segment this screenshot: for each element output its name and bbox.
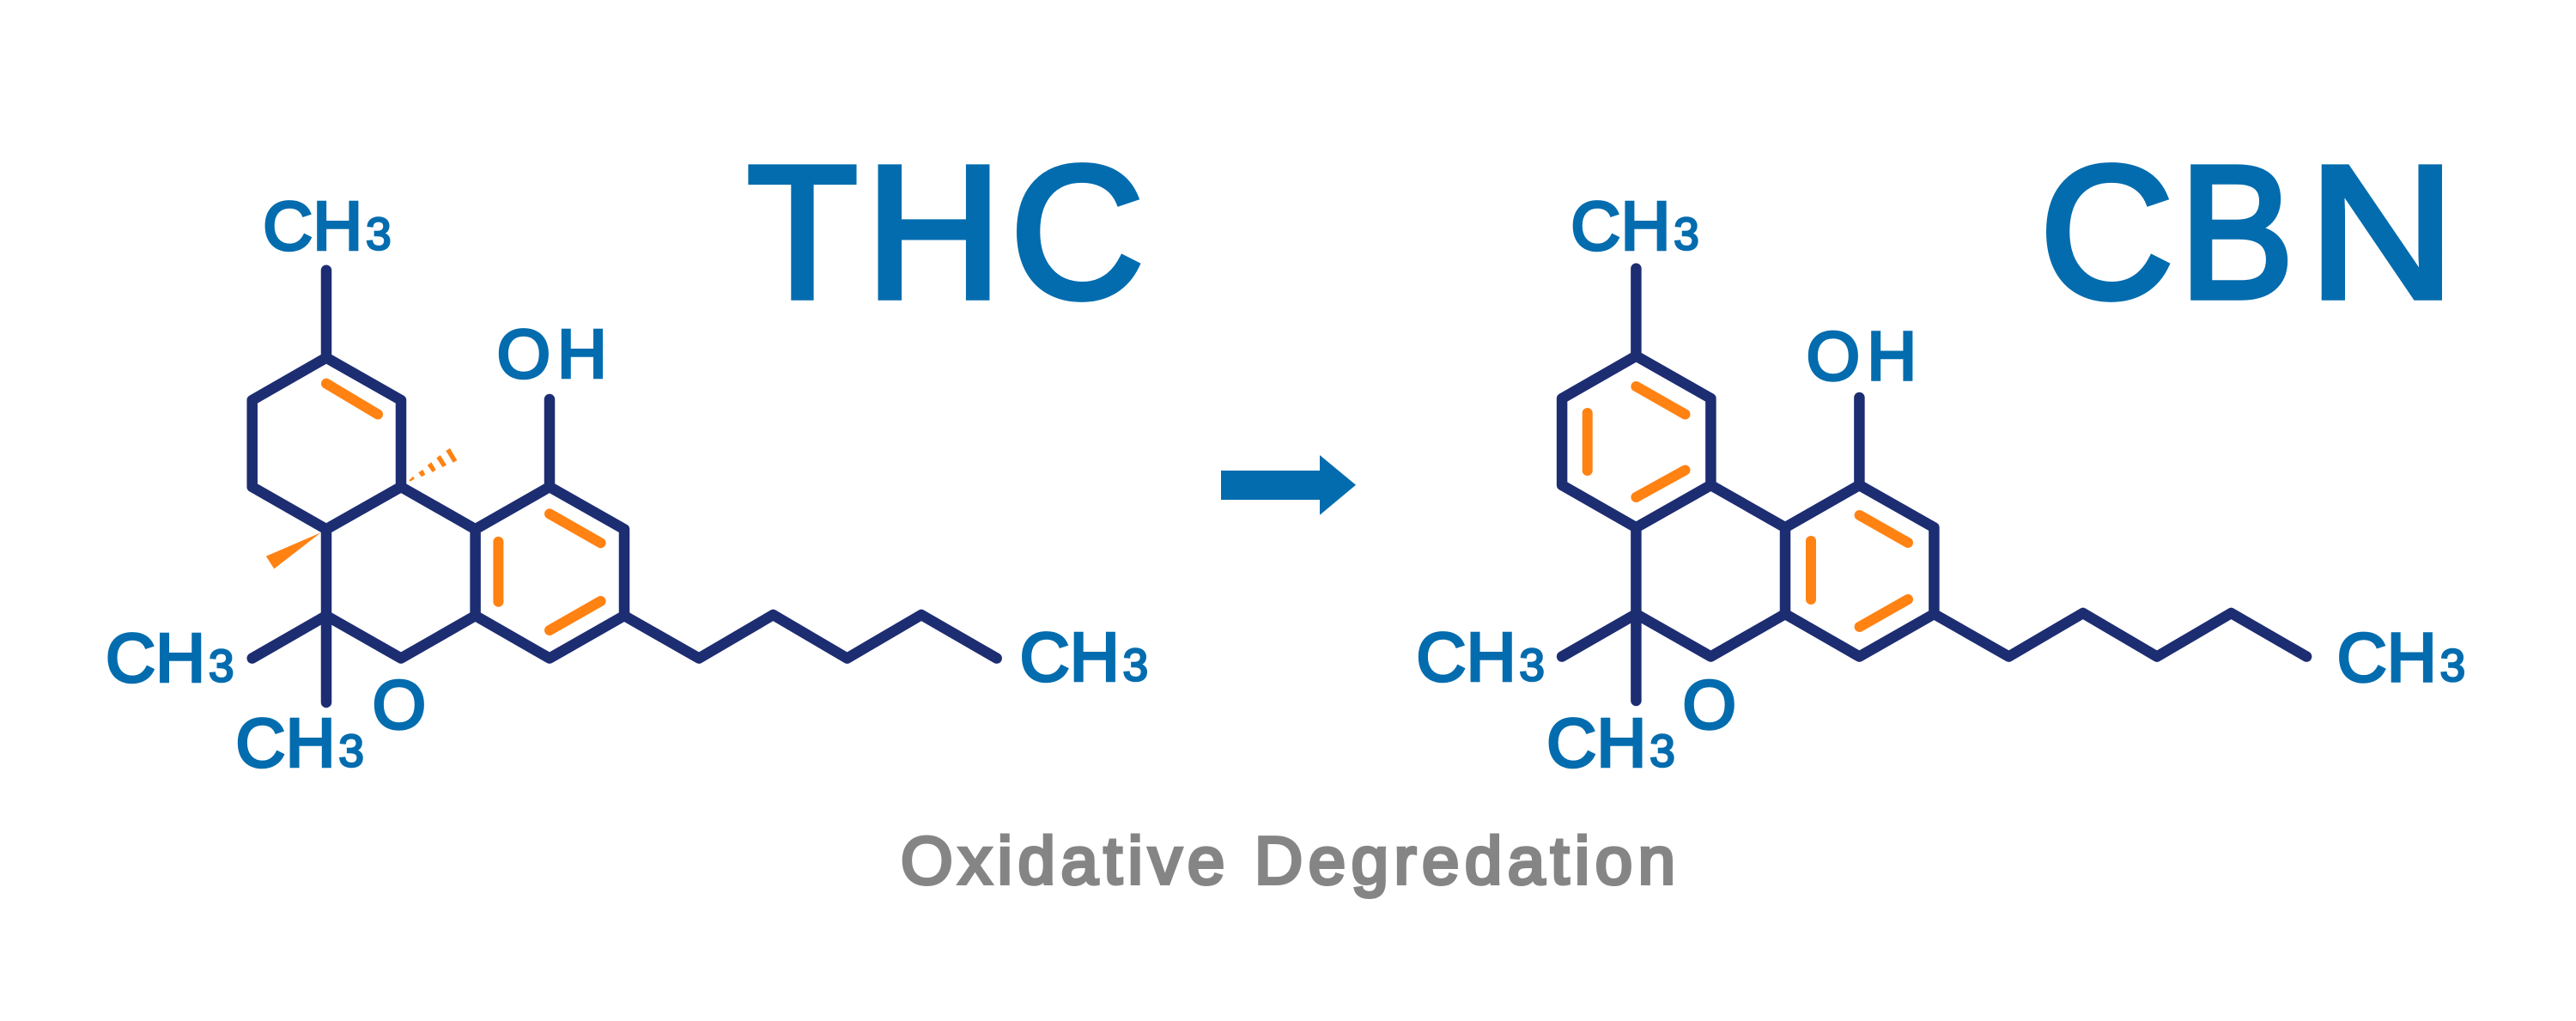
CBN skeletal bonds bbox=[1562, 269, 2306, 701]
CBN label: left CH3 bbox=[1417, 618, 1545, 696]
CBN label: chain CH3 bbox=[2337, 619, 2465, 696]
THC label: bottom CH3: 3 bbox=[338, 726, 364, 776]
CBN label: chain CH3: 3 bbox=[2440, 641, 2465, 691]
heading: THC: C bbox=[1010, 127, 1144, 338]
THC label: top CH3: 3 bbox=[366, 209, 392, 259]
CBN label: ring oxygen: O bbox=[1683, 666, 1736, 743]
panel: THC molecule bbox=[106, 187, 1148, 781]
heading: CBN: C bbox=[2040, 127, 2173, 338]
CBN label: left CH3: C bbox=[1417, 618, 1466, 696]
CBN label: bottom CH3: H bbox=[1597, 704, 1646, 781]
caption: Oxidative Degredation: Oxidative Degredation bbox=[901, 823, 1675, 898]
THC solid wedge bbox=[266, 532, 321, 568]
heading: CBN bbox=[2040, 126, 2456, 338]
THC label: chain CH3: H bbox=[1070, 618, 1120, 696]
THC label: left CH3: C bbox=[106, 620, 155, 696]
heading: THC: T bbox=[747, 126, 858, 337]
THC label: chain CH3: 3 bbox=[1123, 641, 1148, 690]
THC skeletal bonds bbox=[252, 270, 997, 702]
THC label: ring oxygen: O bbox=[373, 666, 426, 743]
THC label: OH: H bbox=[557, 316, 607, 392]
THC label: bottom CH3: H bbox=[286, 704, 335, 781]
THC double bonds bbox=[326, 384, 601, 630]
heading: THC bbox=[747, 126, 1144, 338]
CBN label: bottom CH3: 3 bbox=[1649, 726, 1675, 776]
THC label: left CH3 bbox=[106, 620, 234, 696]
CBN label: OH: O bbox=[1807, 318, 1860, 394]
THC label: top CH3: C bbox=[263, 187, 313, 264]
THC label: OH: O bbox=[497, 316, 550, 392]
THC label: OH bbox=[497, 316, 607, 392]
THC label: top CH3 bbox=[263, 187, 392, 264]
THC label: left CH3: 3 bbox=[209, 641, 234, 692]
CBN label: top CH3: C bbox=[1571, 187, 1620, 264]
CBN label: bottom CH3: C bbox=[1546, 704, 1596, 781]
THC hashed wedge bbox=[409, 448, 457, 482]
CBN label: bottom CH3 bbox=[1546, 704, 1675, 781]
THC label: chain CH3: C bbox=[1020, 618, 1069, 696]
THC label: chain CH3 bbox=[1020, 618, 1148, 696]
CBN double bonds bbox=[1588, 386, 1908, 627]
CBN label: chain CH3: C bbox=[2337, 619, 2386, 696]
heading: THC: H bbox=[866, 126, 1002, 337]
arrow: THC to CBN bbox=[1221, 455, 1356, 515]
CBN label: OH: H bbox=[1867, 318, 1917, 394]
THC label: left CH3: H bbox=[155, 620, 205, 696]
THC label: bottom CH3 bbox=[235, 704, 364, 781]
CBN label: chain CH3: H bbox=[2387, 619, 2437, 696]
THC label: bottom CH3: C bbox=[235, 704, 285, 781]
CBN label: left CH3: H bbox=[1467, 618, 1516, 696]
heading: CBN: N bbox=[2308, 126, 2456, 337]
THC label: top CH3: H bbox=[313, 187, 362, 264]
CBN label: top CH3 bbox=[1571, 187, 1699, 264]
CBN label: top CH3: 3 bbox=[1674, 209, 1699, 259]
CBN label: OH bbox=[1807, 318, 1917, 394]
panel: CBN molecule bbox=[1417, 187, 2465, 781]
CBN label: top CH3: H bbox=[1621, 187, 1670, 264]
CBN label: left CH3: 3 bbox=[1519, 641, 1545, 690]
heading: CBN: B bbox=[2179, 126, 2294, 337]
